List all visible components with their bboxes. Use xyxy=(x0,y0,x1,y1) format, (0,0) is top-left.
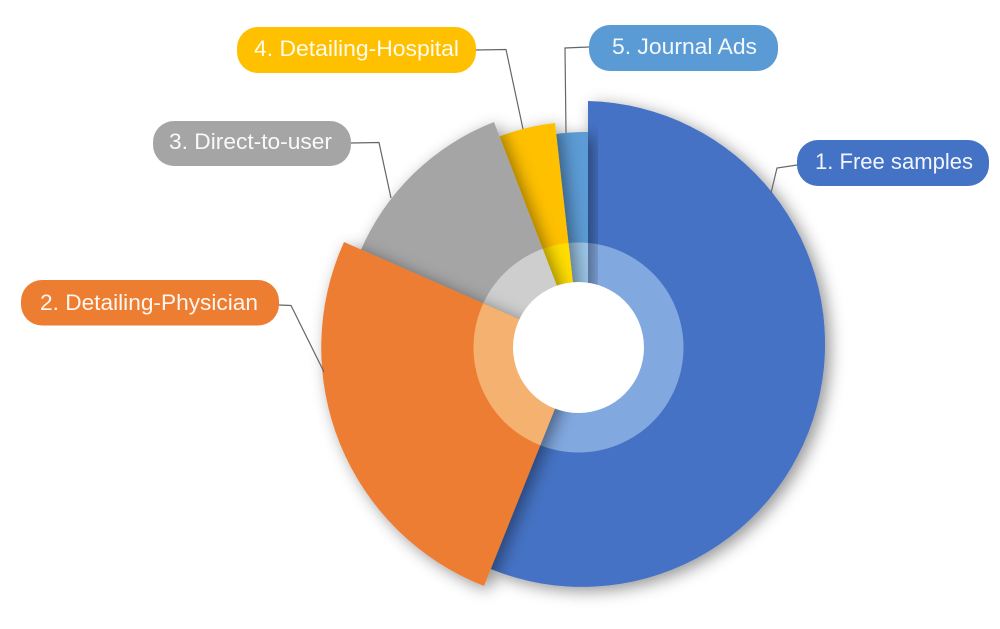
label: 1. Free samples: 1. Free samples xyxy=(815,149,973,174)
slice: free samples xyxy=(490,101,825,587)
label: 4. Detailing-Hospital: 4. Detailing-Hospital xyxy=(254,36,459,61)
donut hole xyxy=(513,282,644,413)
label: 4. Detailing-Hospital xyxy=(237,27,476,73)
label: 2. Detailing-Physician: 2. Detailing-Physician xyxy=(40,290,258,315)
pie chart xyxy=(321,101,825,587)
slice: detailing-hospital xyxy=(500,118,588,286)
label: 5. Journal Ads xyxy=(589,25,778,71)
leader lines xyxy=(279,47,797,372)
label: 1. Free samples xyxy=(797,140,989,186)
label: 5. Journal Ads: 5. Journal Ads xyxy=(612,34,757,59)
slice: direct-to-user xyxy=(359,119,570,319)
label: 2. Detailing-Physician xyxy=(21,280,279,326)
label: 3. Direct-to-user: 3. Direct-to-user xyxy=(169,129,332,154)
slice: detailing-physician xyxy=(321,242,580,586)
label: 3. Direct-to-user xyxy=(153,121,351,166)
slice: journal ads xyxy=(556,132,588,346)
